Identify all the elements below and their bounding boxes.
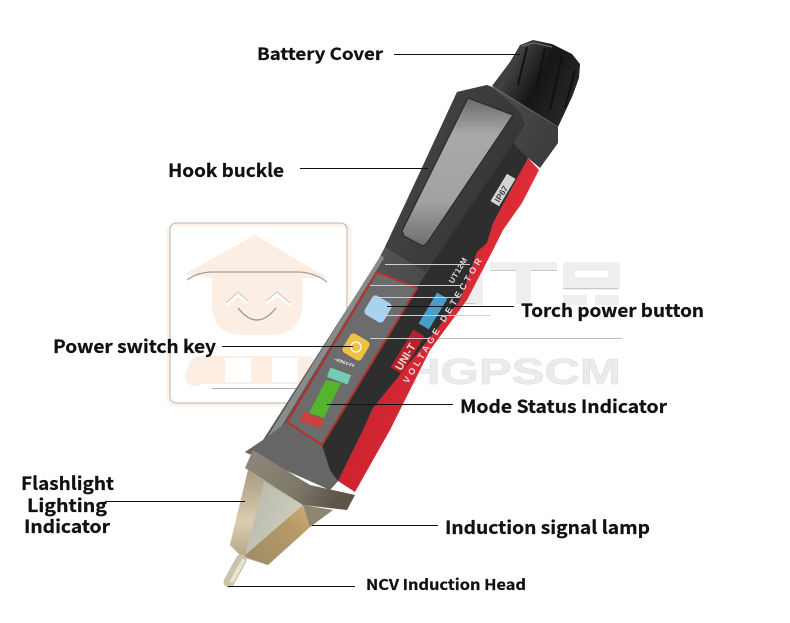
- UNI-T badge: [391, 330, 425, 374]
- voltage detector pen: [229, 40, 580, 582]
- label: hook buckle: Hook buckle: [168, 157, 284, 183]
- label: induction signal lamp: Induction signal lamp: [445, 514, 650, 540]
- hook buckle: [385, 85, 525, 272]
- label: flashlight lighting indicator: Indicator: [24, 513, 110, 539]
- watermark text HGPSCM: HGPSCM: [405, 351, 621, 392]
- power button: [341, 332, 371, 362]
- UNI-T badge: UNI-T: [393, 341, 419, 373]
- red side grip: [338, 158, 539, 492]
- label: torch power button: Torch power button: [521, 297, 704, 323]
- label: mode status indicator: Mode Status Indicator: [460, 393, 667, 419]
- label: flashlight lighting indicator: [21, 470, 245, 539]
- label: flashlight lighting indicator: Flashlight: [21, 470, 114, 496]
- nozzle cone: [230, 470, 333, 565]
- watermark logo: [168, 223, 350, 405]
- label: battery cover: Battery Cover: [257, 40, 384, 65]
- IP67 badge: [490, 174, 516, 207]
- battery cover: [492, 40, 580, 127]
- label: power switch key: Power switch key: [53, 333, 217, 359]
- red label: [300, 412, 324, 428]
- green indicator: [309, 380, 341, 418]
- collar: [245, 450, 355, 510]
- label: NCV induction head: NCV Induction Head: [366, 574, 526, 595]
- body lower grey: [245, 422, 338, 490]
- control panel: [287, 272, 417, 445]
- mode label: [327, 368, 351, 384]
- blue badge: [419, 292, 447, 330]
- main body: [245, 85, 558, 490]
- voltage detector text: VOLTAGE DETECTOR: [401, 256, 484, 385]
- model text: UT12M: [447, 256, 470, 285]
- watermark lines over pen: [370, 264, 490, 338]
- label: flashlight lighting indicator: Lighting: [27, 492, 107, 518]
- watermark wordmark top: [385, 262, 620, 305]
- torch button: [363, 294, 393, 324]
- tip: [229, 560, 243, 582]
- voltage range label: ~4000V-FF: [333, 356, 356, 369]
- dark side strip: [322, 143, 528, 481]
- body light bevel: [266, 255, 384, 442]
- IP67 badge: IP67: [492, 184, 510, 204]
